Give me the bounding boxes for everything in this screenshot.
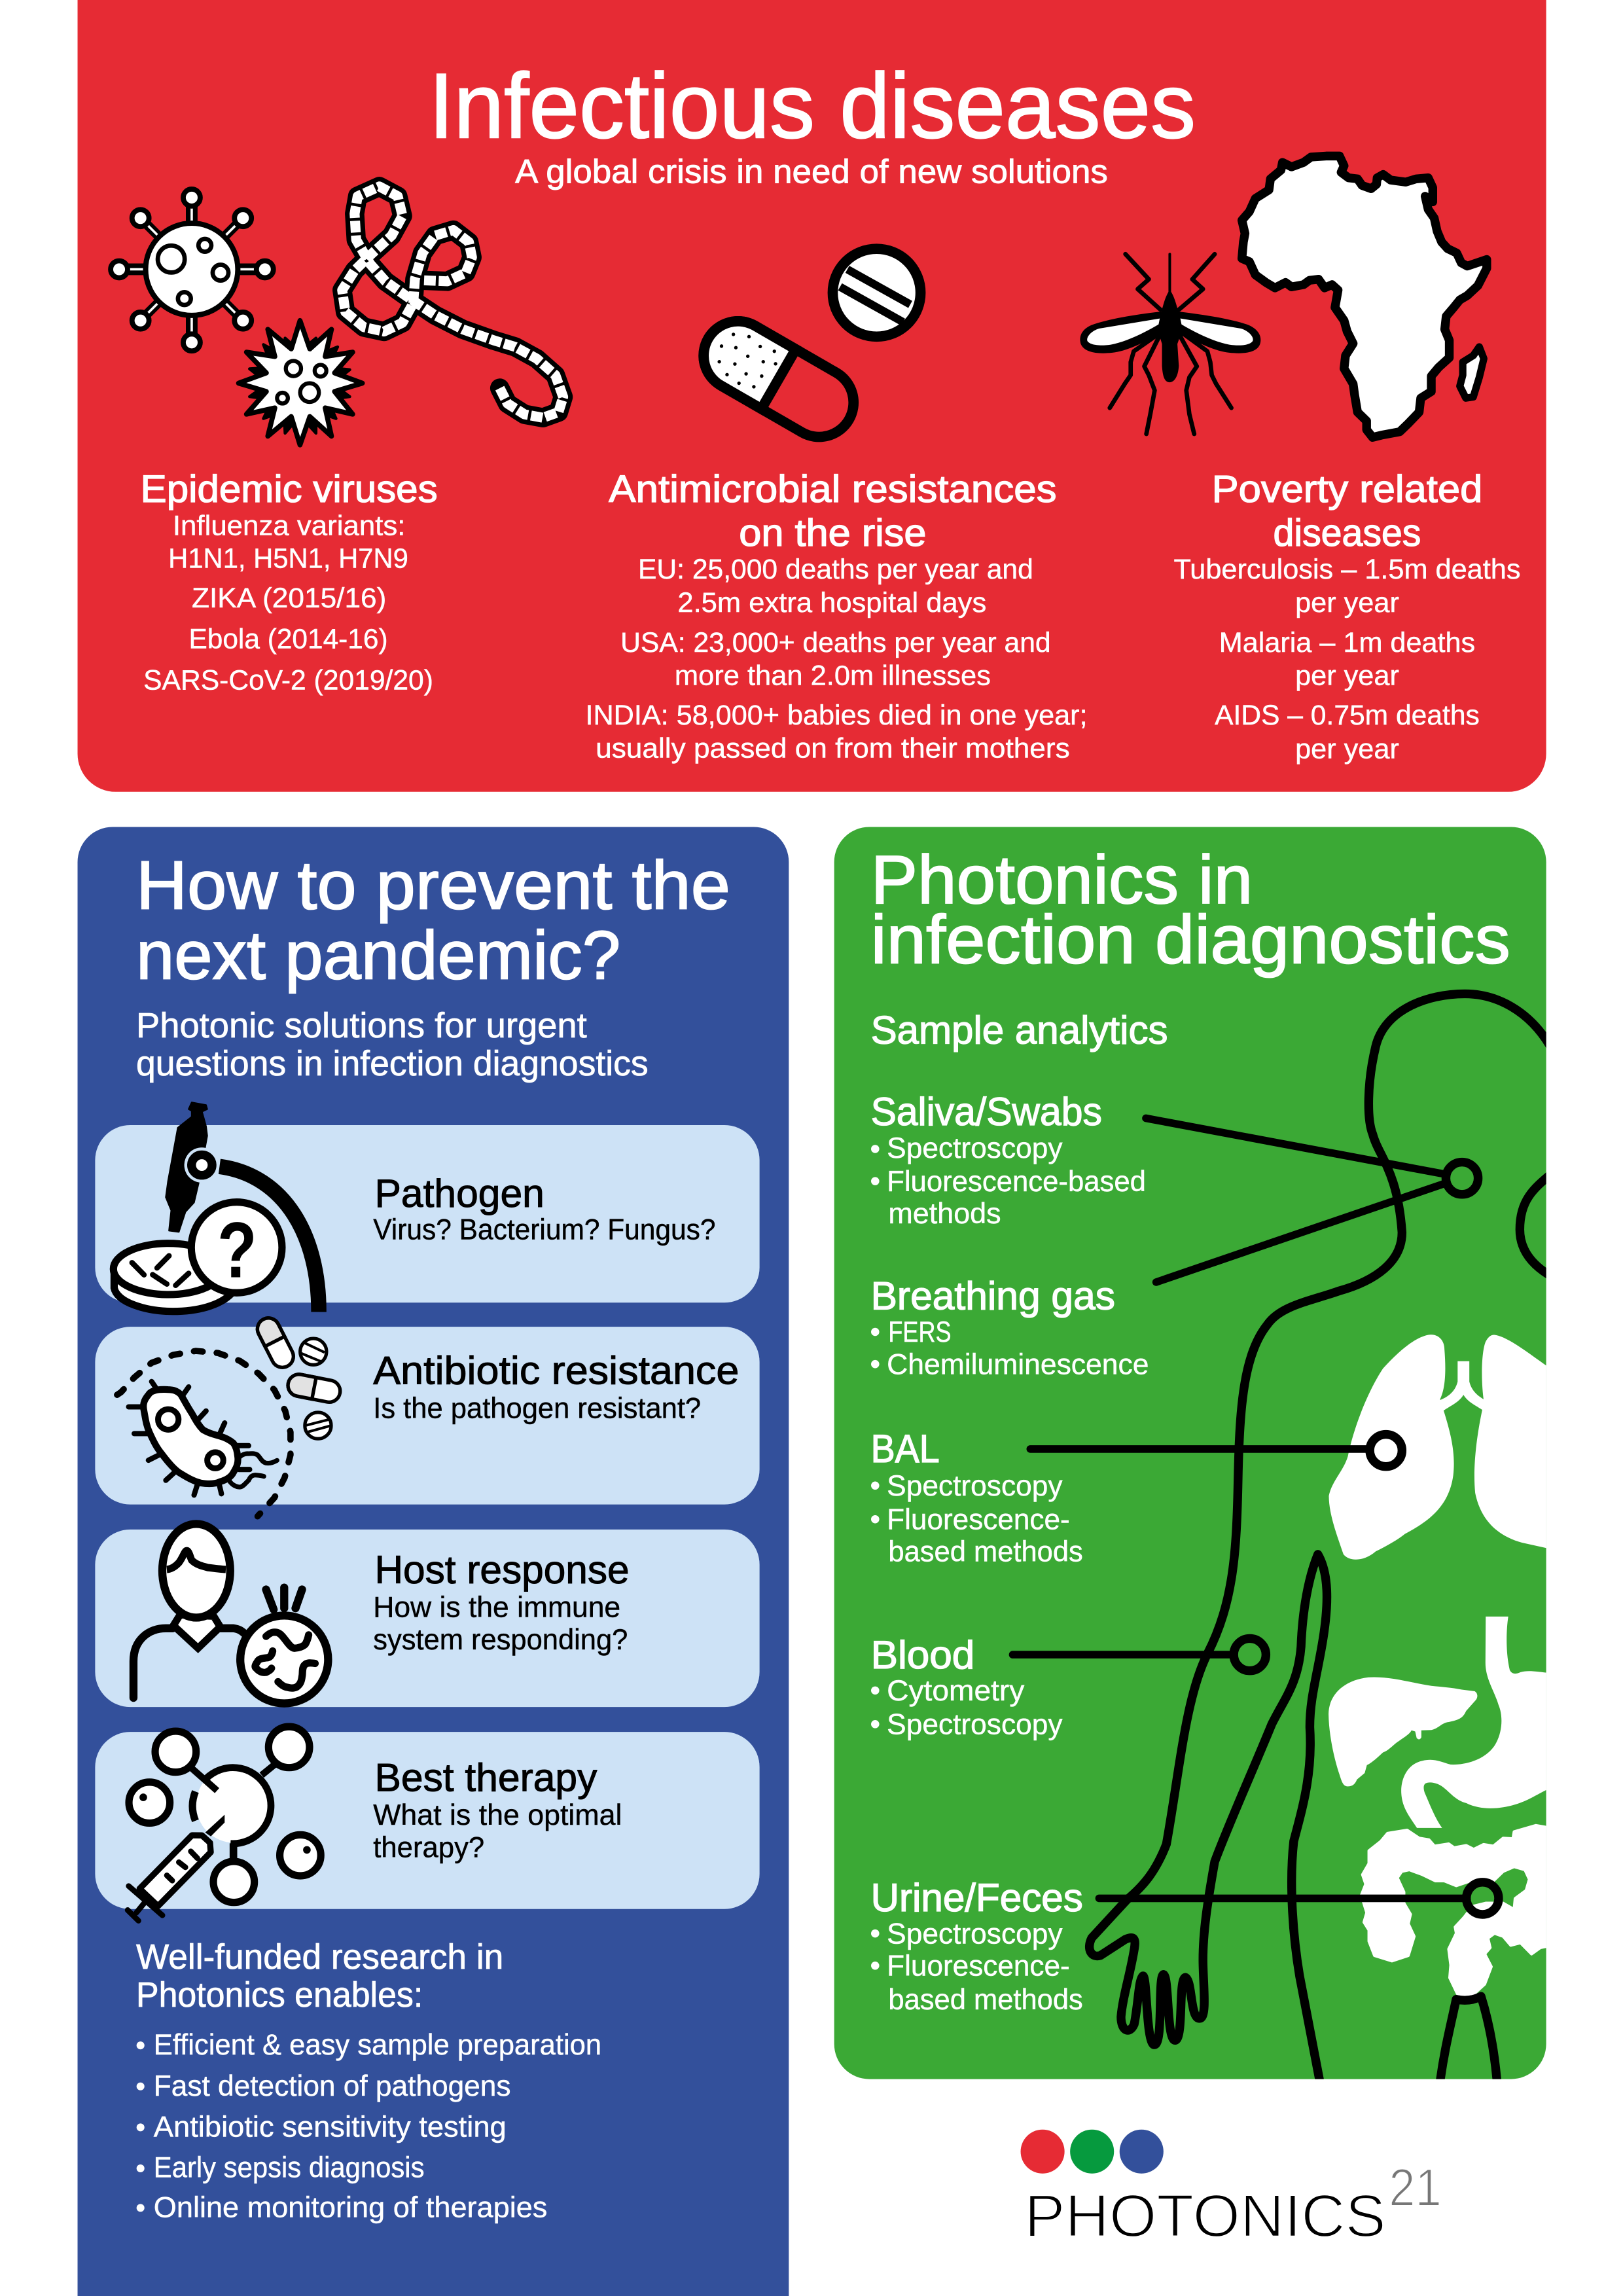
text block: breathing gas: Breathing gas [871, 1274, 1115, 1318]
card: best therapy: What is the optimal [373, 1799, 622, 1831]
text block: BAL: Spectroscopy [887, 1470, 1063, 1502]
card: pathogen [95, 1102, 760, 1312]
icon: microscope: ? [217, 1206, 257, 1295]
text block: BAL: BAL [871, 1426, 940, 1471]
text block: blood: Spectroscopy [887, 1709, 1063, 1741]
text block: blood [871, 1632, 1063, 1741]
pointer lines and rings [1012, 1118, 1499, 1914]
text block: antimicrobial resistances: 2.5m extra hospital days [677, 588, 986, 619]
card: antibiotic resistance [95, 1314, 760, 1516]
text block: poverty related diseases: per year [1295, 588, 1399, 619]
text block: antimicrobial resistances: more than 2.0m illnesses [675, 661, 991, 692]
heading: photonics: infection diagnostics [871, 901, 1510, 978]
panel: how to prevent the next pandemic [78, 827, 789, 2296]
text block: urine feces: Fluorescence- [887, 1950, 1070, 1982]
text block: poverty related diseases: Poverty related [1212, 468, 1482, 511]
text block: antimicrobial resistances: Antimicrobial resistances [609, 468, 1057, 511]
text block: BAL [871, 1426, 1083, 1568]
text block: antimicrobial resistances [585, 468, 1088, 764]
card: pathogen: Virus? Bacterium? Fungus? [373, 1214, 716, 1246]
text block: poverty related diseases [1173, 468, 1520, 764]
text block: research enables: Photonics enables: [136, 1975, 423, 2015]
text block: antimicrobial resistances: INDIA: 58,000+ babies died in one year; [585, 700, 1088, 731]
text block: poverty related diseases: per year [1295, 734, 1399, 764]
text block: research enables [136, 1937, 503, 2015]
text block: research enables: Well-funded research in [136, 1937, 503, 1977]
text block: epidemic viruses: ZIKA (2015/16) [192, 583, 386, 614]
icon: tablet [832, 249, 921, 336]
logo: Photonics21 [1021, 2130, 1442, 2250]
text block: blood: Cytometry [887, 1675, 1025, 1707]
subheading: questions in infection diagnostics [136, 1044, 649, 1083]
text block: antimicrobial resistances: usually passed on from their mothers [596, 733, 1070, 764]
icon: antibiotic capsule [691, 309, 866, 450]
text block: urine feces: Urine/Feces [871, 1875, 1083, 1920]
heading: prevent [136, 847, 730, 994]
icon: ebola filament [342, 187, 563, 418]
bullet list: benefits: Antibiotic sensitivity testing [154, 2111, 507, 2143]
icon: map of Africa [1242, 156, 1487, 437]
logo: Photonics21: 21 [1389, 2159, 1442, 2217]
heading: prevent: How to prevent the [136, 847, 730, 924]
text block: saliva swabs: Fluorescence-based [887, 1166, 1146, 1198]
text block: BAL: based methods [888, 1536, 1083, 1568]
panel: photonics in infection diagnostics [834, 827, 1551, 2083]
body outline [1090, 994, 1551, 2083]
text block: epidemic viruses: Influenza variants: [173, 511, 405, 542]
diagram: human body with organs [1090, 994, 1551, 2083]
bullet list: benefits: Efficient & easy sample preparation [154, 2029, 601, 2061]
text block: urine feces [871, 1875, 1083, 2016]
organs: intestine [1361, 1825, 1548, 1996]
text block: epidemic viruses: H1N1, H5N1, H7N9 [168, 544, 408, 575]
icon: person and immune cell [134, 1524, 328, 1704]
text block: poverty related diseases: AIDS – 0.75m deaths [1215, 700, 1480, 731]
text block: breathing gas [871, 1274, 1149, 1380]
organs: stomach [1401, 1617, 1548, 1828]
organs: liver [1329, 1677, 1477, 1786]
text block: epidemic viruses: Epidemic viruses [141, 468, 438, 511]
card: antibiotic resistance: Antibiotic resistance [373, 1348, 739, 1393]
text block: saliva swabs: Spectroscopy [887, 1132, 1063, 1164]
text block: breathing gas: Chemiluminescence [887, 1348, 1149, 1380]
text block: blood: Blood [871, 1632, 974, 1677]
text block: epidemic viruses: SARS-CoV-2 (2019/20) [143, 665, 433, 696]
text block: saliva swabs [871, 1089, 1146, 1230]
text block: urine feces: based methods [888, 1984, 1083, 2016]
text block: antimicrobial resistances: EU: 25,000 deaths per year and [638, 554, 1033, 585]
bullet list: benefits [137, 2029, 601, 2223]
text block: poverty related diseases: Malaria – 1m deaths [1219, 628, 1475, 658]
text block: epidemic viruses: Ebola (2014-16) [188, 624, 388, 655]
icon: cells and syringe [128, 1727, 321, 1921]
text block: urine feces: Spectroscopy [887, 1918, 1063, 1950]
heading: photonics [871, 842, 1510, 978]
card: best therapy: therapy? [373, 1831, 484, 1863]
bullet list: benefits: Online monitoring of therapies [154, 2191, 547, 2223]
icon: mosquito [1080, 254, 1260, 434]
bullet list: benefits: Early sepsis diagnosis [154, 2152, 425, 2184]
text block: poverty related diseases: diseases [1274, 512, 1421, 554]
heading: photonics: Photonics in [871, 842, 1253, 918]
card: host response: system responding? [373, 1624, 628, 1656]
subtitle: A global crisis in need of new solutions [515, 152, 1108, 190]
icon: bacterium and antibiotics [117, 1314, 342, 1516]
text block: poverty related diseases: Tuberculosis – 1.5m deaths [1173, 554, 1520, 585]
heading: prevent: next pandemic? [136, 918, 620, 994]
card: host response: Host response [374, 1547, 630, 1592]
card: best therapy: Best therapy [374, 1755, 597, 1800]
card: pathogen: Pathogen [374, 1171, 544, 1215]
text block: saliva swabs: methods [888, 1198, 1001, 1230]
text: sample analytics: Sample analytics [871, 1007, 1168, 1052]
text block: antimicrobial resistances: USA: 23,000+ deaths per year and [620, 628, 1051, 658]
card: host response: How is the immune [373, 1592, 620, 1624]
icon: round virus [111, 189, 274, 351]
card: antibiotic resistance: Is the pathogen resistant? [373, 1392, 701, 1424]
card: host response [95, 1524, 760, 1707]
text block: BAL: Fluorescence- [887, 1503, 1070, 1535]
logo: Photonics21: PHOTONICS [1024, 2183, 1386, 2250]
icon: spiky virus [239, 321, 363, 445]
text block: breathing gas: FERS [888, 1316, 952, 1348]
organs: lungs [1329, 1335, 1548, 1560]
text block: saliva swabs: Saliva/Swabs [871, 1089, 1102, 1134]
text block: antimicrobial resistances: on the rise [739, 512, 927, 554]
subheading: Photonic solutions for urgent [136, 1006, 587, 1045]
title: Infectious diseases [429, 54, 1196, 157]
text block: epidemic viruses [141, 468, 438, 696]
bullet list: benefits: Fast detection of pathogens [154, 2070, 510, 2102]
card: best therapy [95, 1727, 760, 1921]
text block: poverty related diseases: per year [1295, 661, 1399, 692]
subheading [136, 1006, 649, 1083]
panel: infectious diseases [78, 0, 1546, 792]
icon: microscope [113, 1102, 319, 1312]
